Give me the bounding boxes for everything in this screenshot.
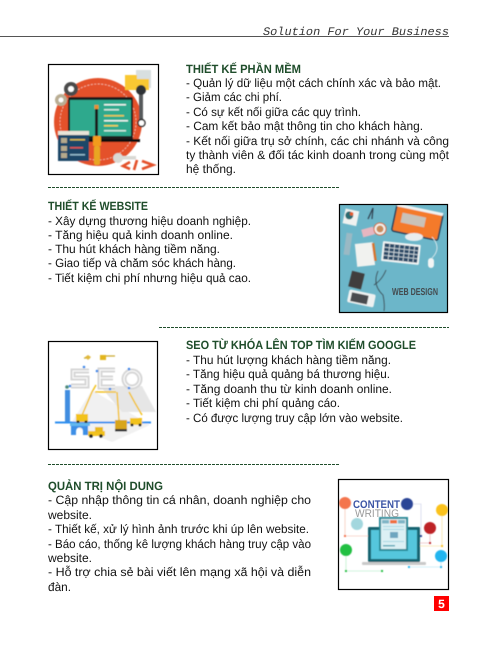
panel: SEO <box>48 338 416 450</box>
icon: content writing illustration: CONTENT <box>353 499 400 511</box>
text block: SEO benefits: - Tăng hiệu quả quảng bá thương hiệu. <box>186 367 390 381</box>
text block: content benefits: - Hỗ trợ chia sẻ bài viết lên mạng xã hội và diễn <box>48 565 311 579</box>
text block: content benefits: đàn. <box>48 580 71 594</box>
page number badge: 5 <box>438 597 445 611</box>
text block: software benefits: ty thành viên & đối tác kinh doanh trong cùng một <box>186 148 450 162</box>
text block: website benefits: - Giao tiếp và chăm sóc khách hàng. <box>48 256 236 270</box>
text block: SEO benefits: - Tiết kiệm chi phí quảng cáo. <box>186 396 340 410</box>
text block: SEO benefits: - Tăng doanh thu từ kinh doanh online. <box>186 382 392 396</box>
panel: content management <box>47 479 449 594</box>
panel: software design <box>48 62 450 176</box>
text block: website benefits: - Thu hút khách hàng tiềm năng. <box>48 242 220 256</box>
text block: SEO benefits: - Thu hút lượng khách hàng tiềm năng. <box>186 353 391 367</box>
text block: website benefits: - Tiết kiệm chi phí nhưng hiệu quả cao. <box>48 271 251 285</box>
heading: THIẾT KẾ WEBSITE <box>48 199 148 213</box>
text block: website benefits: - Tăng hiệu quả kinh doanh online. <box>48 228 233 242</box>
icon: content writing illustration: WRITING <box>355 508 399 520</box>
text block: website benefits: - Xây dựng thương hiệu doanh nghiệp. <box>48 214 251 228</box>
text block: content benefits: website. <box>47 508 92 522</box>
icon: web design desk illustration <box>340 203 448 312</box>
panel: website design <box>48 199 448 312</box>
text block: software benefits: - Quản lý dữ liệu một cách chính xác và bảo mật. <box>186 76 441 90</box>
icon: content writing illustration <box>338 480 448 590</box>
text block: website benefits <box>48 214 251 285</box>
text block: content benefits <box>47 493 311 594</box>
icon: software tools illustration <box>48 64 158 174</box>
heading: THIẾT KẾ PHẦN MỀM <box>186 62 301 76</box>
text block: software benefits: - Có sự kết nối giữa các quy trình. <box>186 105 361 119</box>
text block: SEO benefits: - Có được lượng truy cập lớn vào website. <box>186 411 403 425</box>
text block: content benefits: - Thiết kế, xử lý hình ảnh trước khi úp lên website. <box>48 522 309 536</box>
text block: software benefits: hệ thống. <box>186 162 236 176</box>
text block: content benefits: - Báo cáo, thống kê lượng khách hàng truy cập vào <box>48 537 311 551</box>
text block: software benefits: - Giảm các chi phí. <box>186 90 282 104</box>
text block: software benefits: - Kết nối giữa trụ sở chính, các chi nhánh và công <box>186 134 449 148</box>
text block: content benefits: website. <box>47 551 92 565</box>
text block: content benefits: - Cập nhập thông tin cá nhân, doanh nghiệp cho <box>48 493 311 507</box>
text block: SEO benefits <box>186 353 403 425</box>
icon: SEO construction illustration <box>48 342 158 450</box>
text block: software benefits <box>186 76 450 176</box>
heading: SEO TỪ KHÓA LÊN TOP TÌM KIẾM GOOGLE <box>186 338 416 352</box>
page number badge <box>434 596 449 611</box>
page header: Solution For Your Business <box>263 26 449 39</box>
icon: web design desk illustration: WEB DESIGN <box>392 287 438 298</box>
text block: software benefits: - Cam kết bảo mật thông tin cho khách hàng. <box>186 119 423 133</box>
heading: QUẢN TRỊ NỘI DUNG <box>48 479 163 493</box>
